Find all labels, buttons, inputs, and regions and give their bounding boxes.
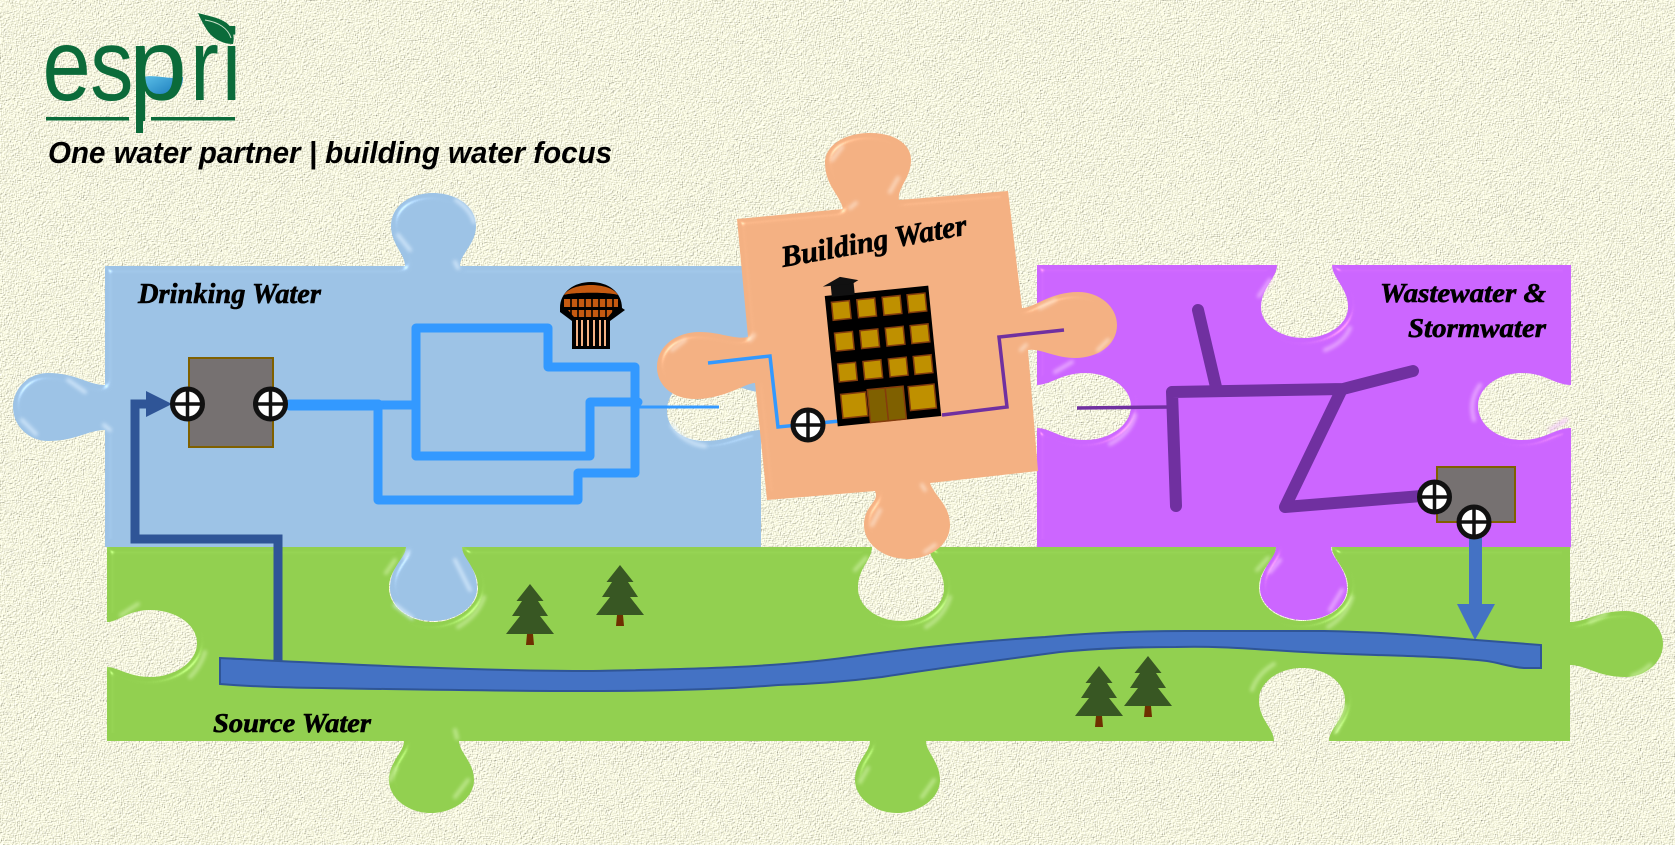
tree [506, 584, 554, 645]
tree [596, 565, 644, 626]
logo: espri: p [129, 8, 187, 122]
valve: wastewater outlet [1459, 507, 1489, 537]
puzzle piece: building water [657, 133, 1117, 559]
effluent arrow to river [1457, 535, 1495, 640]
valve: wastewater inlet [1420, 482, 1450, 512]
wastewater pipe network [1077, 310, 1434, 507]
drinking water pipe network [288, 328, 719, 500]
logo: espri [42, 8, 241, 133]
valve: treatment inlet [172, 389, 202, 419]
icon: building [822, 268, 941, 426]
highlights on drinking water piece [22, 200, 705, 618]
water treatment plant box [189, 358, 273, 447]
heading: building water: Building Water [778, 209, 970, 274]
logo: espri: ri [190, 8, 241, 123]
highlights on wastewater piece [1055, 280, 1566, 610]
puzzle piece: source water [107, 547, 1663, 813]
heading: wastewater and stormwater: Wastewater & [1380, 278, 1546, 308]
building supply pipe [708, 356, 840, 427]
puzzle piece: wastewater and stormwater [1037, 265, 1571, 620]
heading: wastewater and stormwater [1380, 278, 1547, 343]
tagline: One water partner | building water focus [48, 135, 612, 170]
heading: source water: Source Water [213, 708, 372, 738]
heading: wastewater and stormwater: Stormwater [1408, 313, 1547, 343]
highlights on building water piece [672, 147, 1108, 552]
puzzle piece: drinking water [13, 193, 761, 621]
tree [1075, 666, 1123, 727]
wastewater treatment plant box [1437, 467, 1515, 522]
building drain pipe [942, 330, 1064, 415]
logo: espri: es [43, 8, 133, 123]
valve: building entry [793, 410, 823, 440]
tree [1124, 656, 1172, 717]
highlights on source water piece [121, 558, 1650, 797]
source intake pipe with arrow [135, 391, 278, 662]
valve: treatment outlet [256, 389, 286, 419]
icon: water tower [560, 282, 625, 349]
heading: drinking water: Drinking Water [137, 279, 322, 310]
river [220, 631, 1541, 691]
